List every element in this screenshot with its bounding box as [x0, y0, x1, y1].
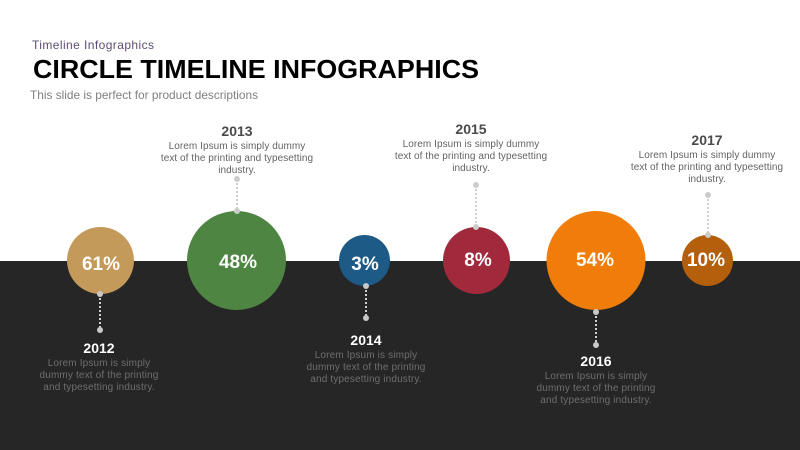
- connector 2013: [234, 176, 240, 214]
- description 2012: and typesetting industry.: [43, 382, 155, 393]
- year 2016: 2016: [580, 353, 612, 369]
- description 2012: Lorem Ipsum is simply: [48, 358, 150, 369]
- tagline: This slide is perfect for product descriptions: [30, 88, 258, 102]
- description 2017: text of the printing and typesetting: [631, 162, 783, 173]
- connector 2014: [363, 283, 369, 321]
- description 2014: Lorem Ipsum is simply: [315, 350, 417, 361]
- year 2015: 2015: [455, 121, 487, 137]
- value: 8%: 8%: [464, 250, 492, 271]
- description 2014: dummy text of the printing: [307, 362, 425, 373]
- description 2013: text of the printing and typesetting: [161, 153, 313, 164]
- dark lower band: [0, 261, 800, 450]
- connector 2017: [705, 192, 711, 238]
- milestone 2017: [631, 132, 783, 286]
- circle: 10%: [682, 235, 733, 286]
- description 2012: dummy text of the printing: [40, 370, 158, 381]
- title: CIRCLE TIMELINE INFOGRAPHICS: [33, 54, 479, 84]
- circle: 3%: [339, 235, 390, 286]
- description 2016: and typesetting industry.: [540, 395, 652, 406]
- milestone 2012: [40, 227, 158, 393]
- description 2017: industry.: [688, 174, 726, 185]
- year 2017: 2017: [691, 132, 723, 148]
- value: 10%: 10%: [687, 250, 725, 271]
- description 2015: text of the printing and typesetting: [395, 151, 547, 162]
- description 2017: Lorem Ipsum is simply dummy: [639, 150, 775, 161]
- circle: 48%: [187, 211, 286, 310]
- description 2015: Lorem Ipsum is simply dummy: [403, 139, 539, 150]
- milestone 2016: [537, 211, 655, 406]
- description 2016: Lorem Ipsum is simply: [545, 371, 647, 382]
- year 2012: 2012: [83, 340, 115, 356]
- year 2013: 2013: [221, 123, 253, 139]
- subtitle label: Timeline Infographics: [32, 38, 154, 52]
- description 2015: industry.: [452, 163, 490, 174]
- value: 61%: 61%: [82, 254, 120, 275]
- milestone 2015: [395, 121, 547, 294]
- description 2013: Lorem Ipsum is simply dummy: [169, 141, 305, 152]
- description 2013: industry.: [218, 165, 256, 176]
- year 2014: 2014: [350, 332, 382, 348]
- milestone 2013: [161, 123, 313, 310]
- circle: 8%: [443, 227, 510, 294]
- value: 3%: 3%: [351, 254, 379, 275]
- connector 2015: [473, 182, 479, 230]
- circle: 54%: [546, 211, 646, 310]
- circle: 61%: [67, 227, 134, 294]
- description 2014: and typesetting industry.: [310, 374, 422, 385]
- description 2016: dummy text of the printing: [537, 383, 655, 394]
- connector 2016: [593, 309, 599, 348]
- connector 2012: [97, 291, 103, 333]
- value: 54%: 54%: [576, 250, 614, 271]
- milestone 2014: [307, 235, 425, 385]
- value: 48%: 48%: [219, 252, 257, 273]
